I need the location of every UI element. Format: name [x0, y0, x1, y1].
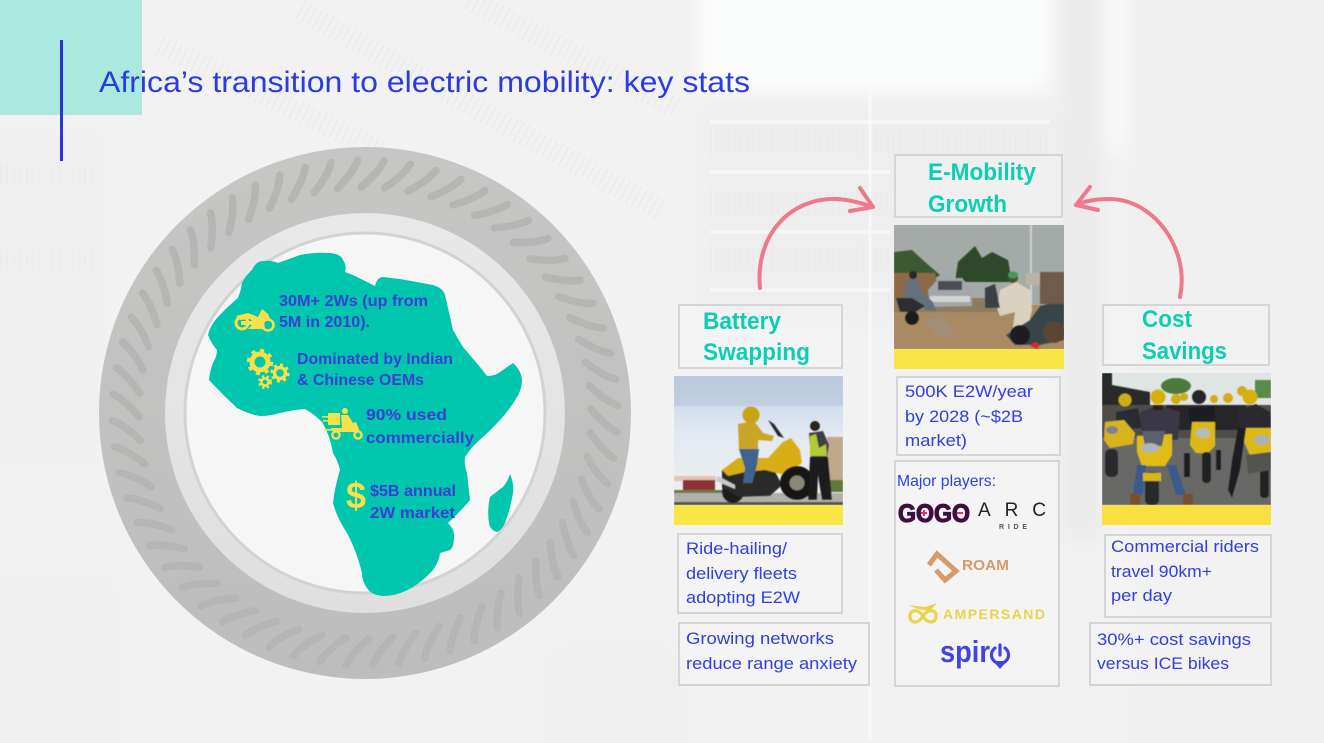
title accent line	[60, 40, 63, 161]
logo: ARC Ride: ARC	[978, 500, 1046, 521]
yellow caption band	[674, 505, 843, 525]
heading: E-Mobility Growth: E-Mobility	[928, 159, 1037, 186]
tyre body	[60, 103, 670, 723]
Africa map	[208, 253, 522, 596]
photo: group of riders on yellow motorbikes	[1102, 373, 1271, 525]
teal corner block	[0, 0, 142, 115]
logo: ARC Ride	[978, 500, 1046, 531]
stat: commercial use: 90% used	[366, 407, 447, 424]
heading: Battery Swapping: Swapping	[703, 339, 810, 366]
text box: daily distance: per day	[1111, 586, 1173, 605]
rider	[738, 421, 774, 450]
icon: delivery scooter	[322, 408, 362, 439]
heading: E-Mobility Growth	[895, 155, 1062, 218]
text box: daily distance: travel 90km+	[1111, 562, 1212, 581]
stat: commercial use: commercially	[366, 430, 474, 447]
text box: market forecast: 500K E2W/year	[905, 382, 1033, 401]
stat: 30M+ 2Ws: 5M in 2010).	[279, 314, 370, 331]
text box: cost savings: versus ICE bikes	[1097, 654, 1229, 673]
icon: motorcycle	[236, 309, 274, 330]
stat: 30M+ 2Ws: 30M+ 2Ws (up from	[279, 293, 428, 310]
text box: swap networks: reduce range anxiety	[686, 654, 858, 673]
heading: Cost Savings: Savings	[1142, 338, 1227, 365]
text box: ride-hailing fleets: delivery fleets	[686, 564, 797, 583]
logo: Roam: ROAM	[962, 557, 1009, 574]
heading: Battery Swapping: Battery	[703, 308, 782, 335]
stat: OEMs: Dominated by Indian	[297, 351, 453, 368]
seated man	[997, 282, 1032, 334]
stat: OEMs: & Chinese OEMs	[297, 372, 424, 389]
logo: Roam	[929, 554, 1009, 580]
stat: OEMs	[248, 350, 453, 389]
man in vest	[810, 421, 820, 431]
text box: daily distance	[1105, 535, 1271, 617]
wheel rim	[165, 213, 565, 613]
text box: market forecast: by 2028 (~$2B	[905, 407, 1023, 426]
photo: motorbike taxi riders waiting at roadside	[894, 225, 1065, 369]
arrow: battery swapping to growth	[760, 188, 873, 288]
title: Africa’s transition to electric mobility: key stats	[99, 66, 750, 99]
left rider	[1116, 408, 1142, 430]
heading: Battery Swapping	[679, 305, 842, 368]
left rider and bike	[904, 277, 936, 311]
right motorbike	[1006, 300, 1064, 345]
front rider	[1140, 405, 1180, 440]
motorbike	[722, 488, 744, 504]
stat: 30M+ 2Ws	[236, 293, 428, 331]
heading: E-Mobility Growth: Growth	[928, 191, 1007, 218]
text box: ride-hailing fleets	[678, 534, 842, 613]
stat: market size: $5B annual	[370, 483, 456, 500]
text box: swap networks: Growing networks	[686, 629, 834, 648]
parked car	[928, 278, 972, 307]
icon: dollar sign: $	[346, 475, 366, 516]
text box: ride-hailing fleets: Ride-hailing/	[686, 539, 787, 558]
stat: market size: 2W market	[370, 505, 456, 522]
text box: daily distance: Commercial riders	[1111, 537, 1259, 556]
stat: market size	[346, 475, 456, 522]
logo: ARC Ride: RIDE	[999, 524, 1027, 531]
text box: cost savings: 30%+ cost savings	[1097, 630, 1251, 649]
stat: commercial use	[322, 407, 474, 447]
arrow: cost savings to growth	[1076, 187, 1182, 297]
text box: market forecast	[897, 377, 1060, 455]
middle rider	[1188, 406, 1216, 424]
text box: market forecast: market)	[905, 431, 967, 450]
text box: cost savings	[1090, 623, 1271, 685]
logo: Ampersand: AMPERSAND	[943, 606, 1045, 622]
text box: swap networks	[679, 623, 869, 685]
icon: gears	[248, 350, 288, 388]
panel: major players: Major players:	[897, 473, 996, 490]
text box: ride-hailing fleets: adopting E2W	[686, 588, 800, 607]
back row	[1171, 394, 1181, 404]
photo: rider on yellow motorbike with man in vest	[674, 376, 843, 525]
tyre with Africa map	[60, 103, 670, 723]
logo: Ampersand	[908, 603, 1045, 622]
right rider	[1246, 403, 1271, 428]
logo: Gogo: GOGO	[898, 500, 970, 528]
heading: Cost Savings	[1103, 305, 1269, 365]
panel: major players	[895, 461, 1059, 686]
yellow caption band	[1102, 505, 1271, 525]
logo: Spiro: spir	[940, 634, 990, 669]
heading: Cost Savings: Cost	[1142, 306, 1192, 333]
concrete slab	[926, 316, 955, 337]
yellow caption band	[894, 349, 1064, 369]
